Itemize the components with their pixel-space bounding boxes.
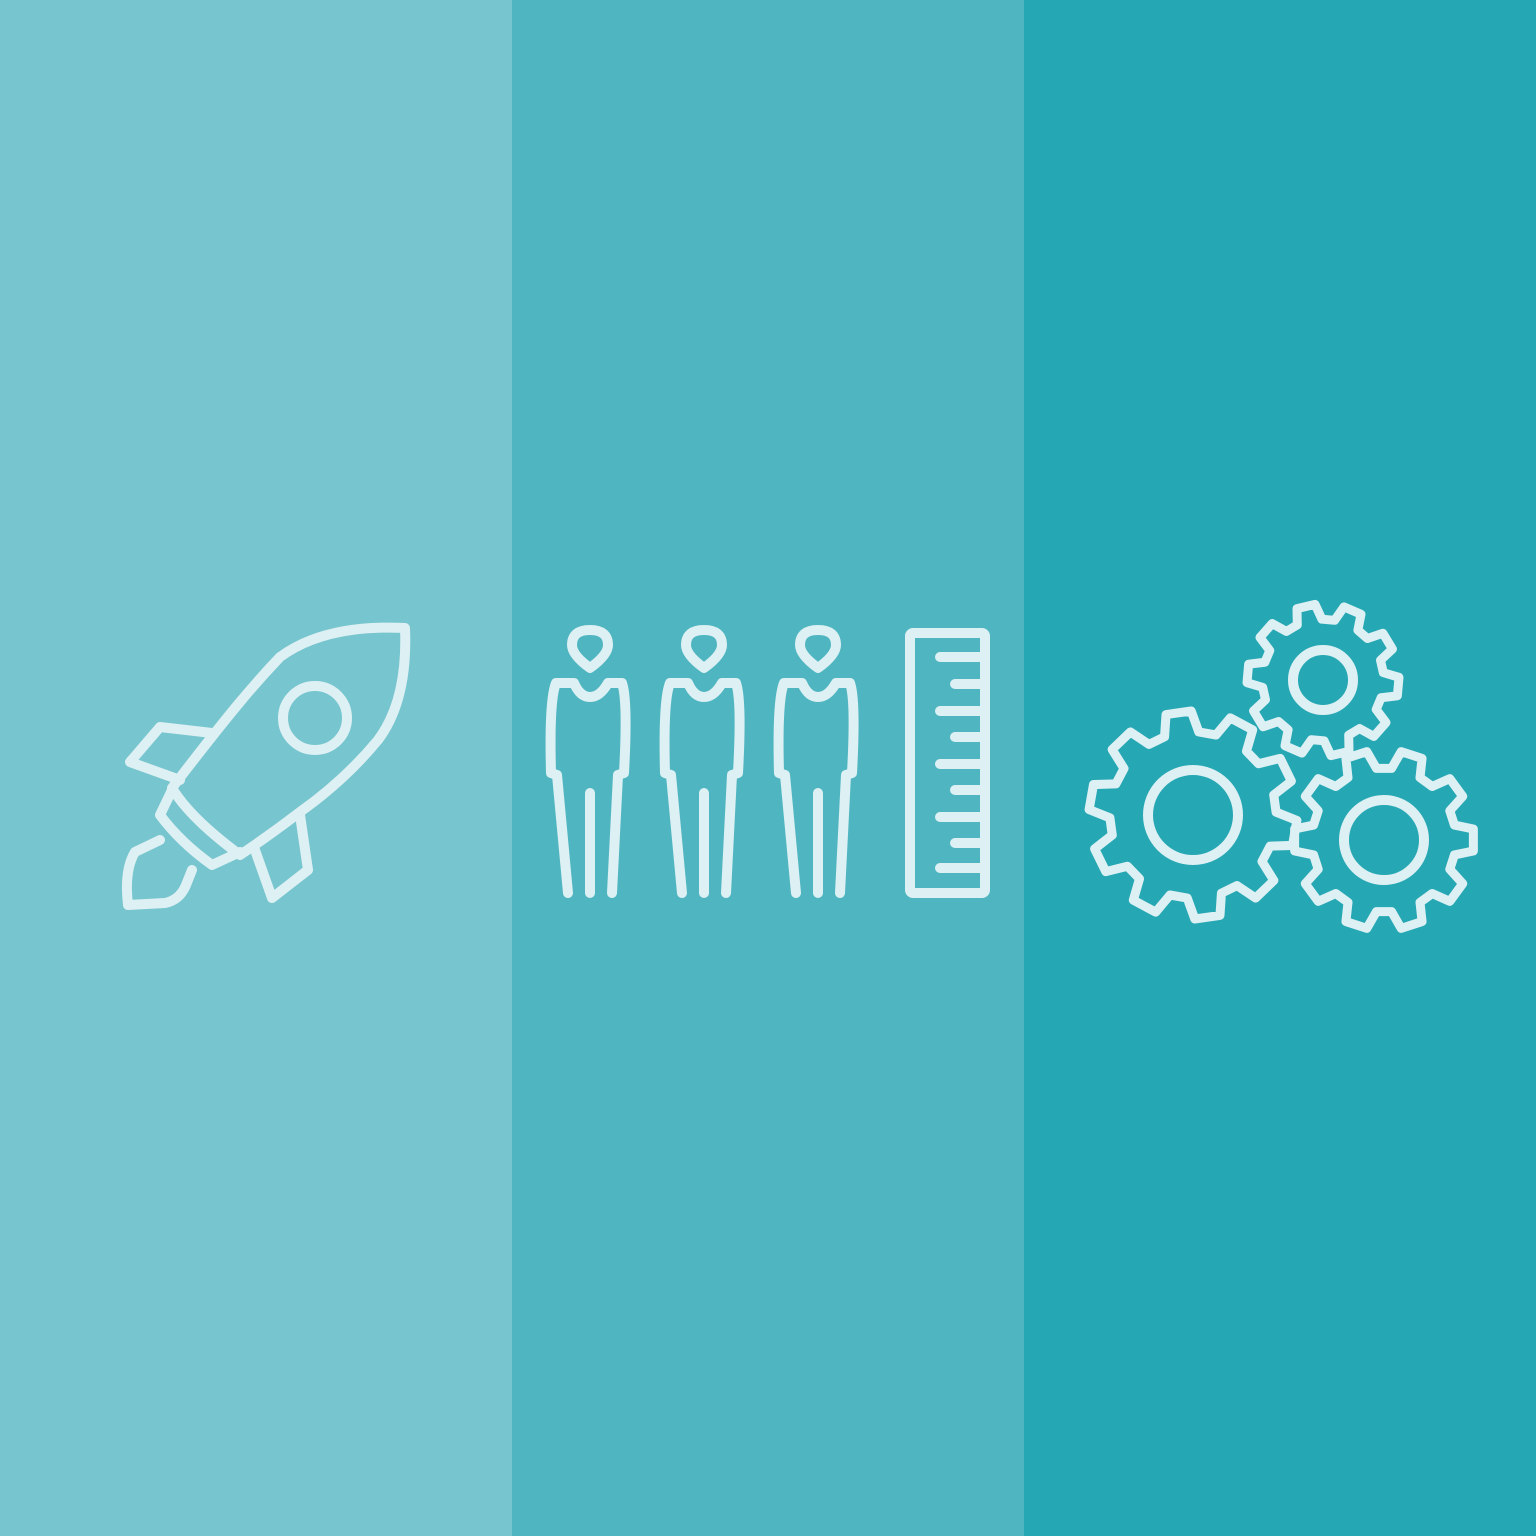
panel: right <box>1024 0 1536 1536</box>
panel: left <box>0 0 512 1536</box>
ruler <box>910 633 985 893</box>
person 1 <box>551 630 626 893</box>
panel: middle <box>512 0 1024 1536</box>
icon: people with ruler <box>551 630 985 893</box>
person 2 <box>665 630 740 893</box>
person 3 <box>779 630 854 893</box>
icon: gears <box>1074 599 1473 934</box>
icon: rocket <box>127 628 405 905</box>
